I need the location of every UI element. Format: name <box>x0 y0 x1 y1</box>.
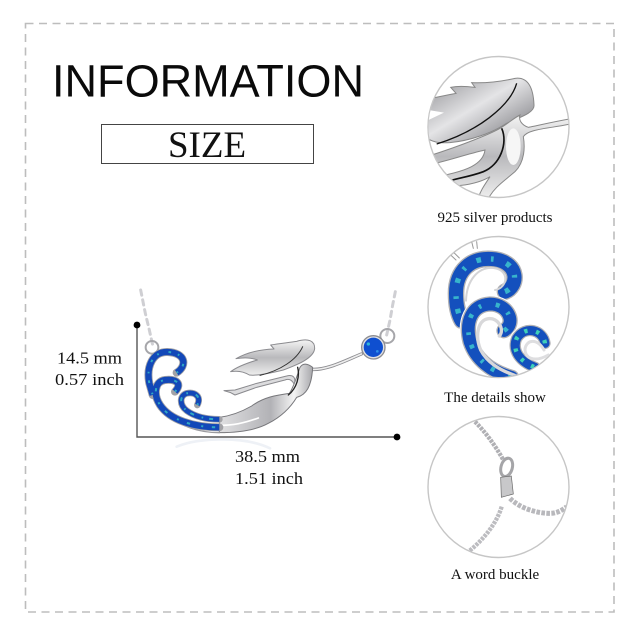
height label <box>55 348 125 389</box>
hair dark line <box>260 347 303 375</box>
ring hints <box>451 242 477 260</box>
body closeup <box>427 115 573 198</box>
clasp ring <box>499 457 515 478</box>
reflection <box>177 439 270 448</box>
width label <box>235 447 304 488</box>
back arm to stone <box>311 354 361 369</box>
detail circle: opal waves <box>428 236 569 378</box>
small wave <box>515 330 548 367</box>
necklace illustration <box>141 290 395 448</box>
dimension axes <box>134 322 400 440</box>
title: INFORMATION <box>52 56 364 106</box>
caption: buckle: A word buckle <box>451 567 539 583</box>
size heading box: SIZE <box>168 125 246 166</box>
tail and torso <box>219 364 313 433</box>
height label: 0.57 inch <box>55 370 125 389</box>
width label: 38.5 mm <box>235 447 300 466</box>
white gap between locks <box>429 110 444 120</box>
upper chain <box>475 422 503 460</box>
detail circle: clasp <box>428 416 569 558</box>
wave outlines <box>148 352 219 427</box>
right chain <box>387 292 395 335</box>
back arm highlight <box>311 354 361 369</box>
torso highlight <box>506 128 521 165</box>
width label: 1.51 inch <box>235 469 304 488</box>
caption: silver: 925 silver products <box>438 210 553 226</box>
silver outer rim <box>145 375 219 433</box>
tail line <box>219 418 258 425</box>
size heading box <box>102 124 314 166</box>
hair closeup <box>427 78 534 143</box>
hair edge line <box>437 83 517 144</box>
opal flecks <box>148 352 219 427</box>
blue opal bands <box>148 352 219 427</box>
extender chain <box>510 498 567 513</box>
left chain <box>141 290 153 345</box>
lobster clasp <box>501 476 513 497</box>
jump rings <box>146 329 394 354</box>
hair <box>231 340 315 375</box>
lower chain <box>468 507 502 552</box>
height label: 14.5 mm <box>57 348 122 368</box>
body dark line <box>288 367 298 395</box>
front arm <box>224 376 295 395</box>
round opal stone <box>362 336 385 359</box>
caption: details: The details show <box>444 390 546 406</box>
detail circle: silver <box>425 56 573 198</box>
dark body line <box>447 128 504 182</box>
medium wave <box>468 304 518 377</box>
large wave <box>456 259 515 321</box>
